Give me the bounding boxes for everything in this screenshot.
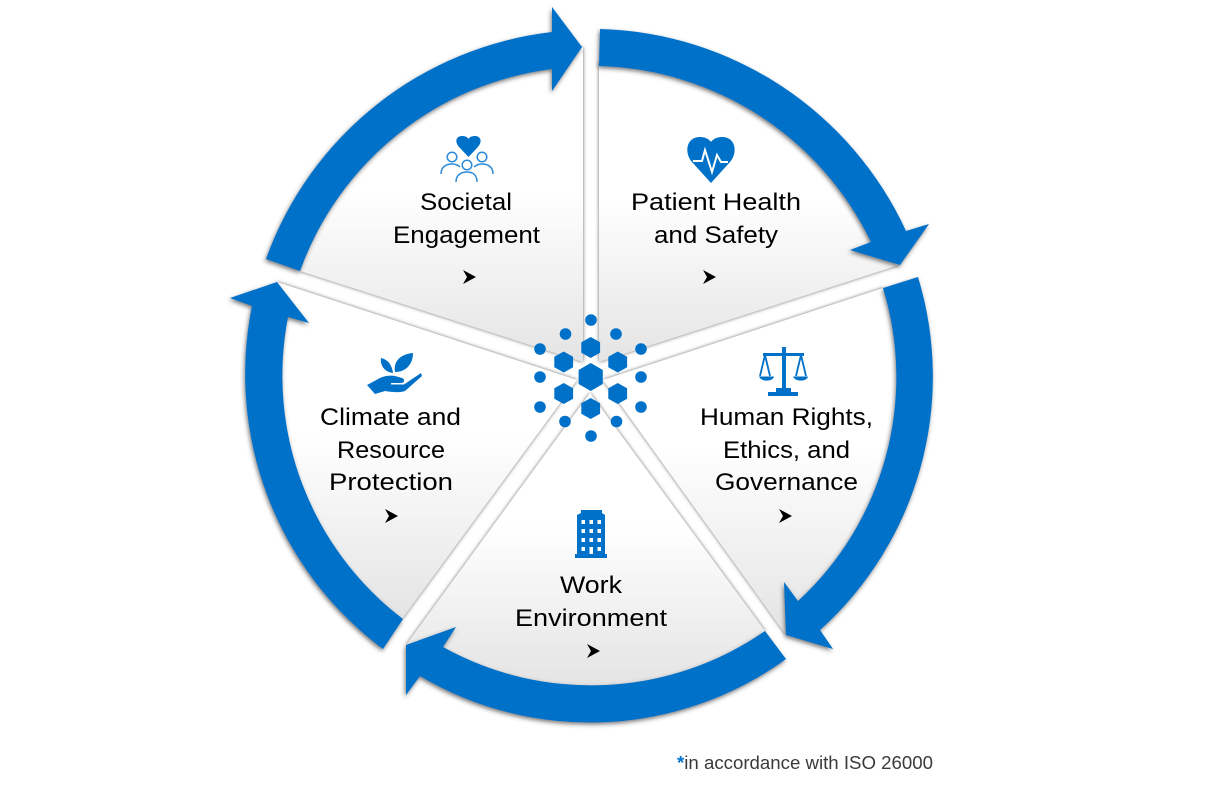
- panel: Climate and Resource Protection: [277, 282, 577, 619]
- arrow: to Societal: [230, 282, 403, 649]
- center icon: hexagon cluster: [534, 314, 647, 442]
- heading: Human Rights, Ethics, and Governance: Governance: [715, 469, 858, 496]
- heading: Patient Health and Safety: and Safety: [654, 222, 778, 249]
- panel: Patient Health and Safety: [599, 62, 899, 362]
- heading: Climate and Resource Protection: [320, 404, 461, 496]
- icon: arrowhead: [779, 509, 792, 523]
- icon: arrowhead: [703, 270, 716, 284]
- arrow: to Patient Health: [266, 7, 582, 271]
- heading: Societal Engagement: [393, 189, 540, 249]
- icon: arrowhead: [385, 509, 398, 523]
- heading: Climate and Resource Protection: Resource: [337, 437, 445, 464]
- panel: Societal Engagement: [300, 47, 583, 362]
- icon: hand holding plant: [367, 353, 422, 394]
- heading: Human Rights, Ethics, and Governance: Ethics, and: [723, 437, 850, 464]
- heading: Work Environment: Environment: [515, 605, 667, 632]
- arrow: to Work Environment: [784, 277, 933, 649]
- icon: arrowhead: [463, 270, 476, 284]
- heading: Patient Health and Safety: [631, 189, 801, 249]
- icon: people with heart: [441, 136, 493, 182]
- heading: Climate and Resource Protection: Climate and: [320, 404, 461, 431]
- heading: Patient Health and Safety: Patient Health: [631, 189, 801, 216]
- heading: Work Environment: Work: [560, 572, 623, 599]
- heading: Human Rights, Ethics, and Governance: Human Rights,: [700, 404, 873, 431]
- heading: Human Rights, Ethics, and Governance: [700, 404, 873, 496]
- heading: Societal Engagement: Engagement: [393, 222, 540, 249]
- icon: heart with pulse: [687, 137, 735, 183]
- heading: Climate and Resource Protection: Protection: [329, 469, 453, 496]
- icon: scales of justice: [759, 347, 808, 396]
- icon: office building: [575, 510, 607, 558]
- arrow: to Human Rights: [599, 29, 929, 265]
- heading: Work Environment: [515, 572, 667, 632]
- icon: arrowhead: [587, 644, 600, 658]
- panel: Human Rights, Ethics, and Governance: [603, 288, 897, 635]
- footnote: *in accordance with ISO 26000: [677, 753, 933, 773]
- heading: Societal Engagement: Societal: [420, 189, 512, 216]
- arrow: to Climate: [406, 627, 786, 723]
- panel: Work Environment: [406, 393, 765, 685]
